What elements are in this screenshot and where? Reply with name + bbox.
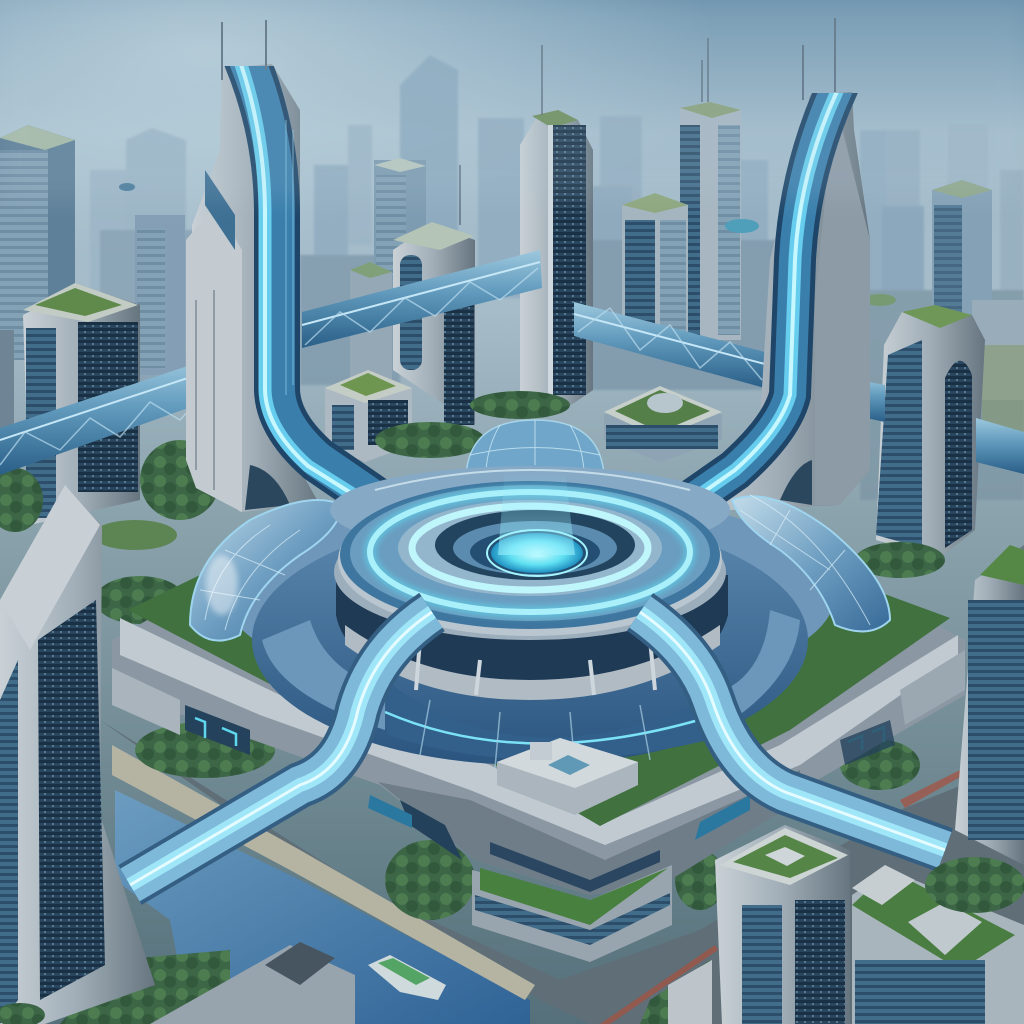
- foreground tower bottom centre: [715, 825, 850, 1024]
- right pylon tower: [685, 18, 870, 510]
- channel: front left: [130, 612, 432, 885]
- ground: road and water: [60, 720, 1024, 1024]
- podium: front panels: [378, 770, 800, 895]
- atmospheric haze: [0, 0, 1024, 200]
- tube: right upper: [574, 302, 765, 388]
- podium: planted terraces: [128, 555, 950, 826]
- rooftop module: [497, 738, 638, 815]
- ferry boat: [368, 955, 446, 1000]
- dome: left shell: [190, 500, 342, 641]
- dome: right shell: [732, 495, 890, 631]
- tower: right with green roof: [876, 305, 985, 558]
- podium: body: [112, 500, 965, 895]
- drum: rear deck: [330, 466, 730, 554]
- hub podium base: [112, 500, 965, 895]
- pylon tube: [232, 40, 385, 510]
- channel: front right: [640, 612, 945, 850]
- vehicle: distant craft: [119, 183, 135, 191]
- tower: blue centre: [374, 158, 426, 280]
- foreground tower right: [955, 545, 1024, 865]
- antennae: [460, 38, 708, 225]
- building: roof garden: [604, 386, 722, 462]
- pylon tube: [685, 65, 850, 505]
- core energy beam: [498, 470, 575, 555]
- foreground building bottom right: [852, 857, 1024, 1024]
- building: small block: [325, 370, 412, 462]
- tube: right lower: [838, 376, 885, 422]
- mid-ground towers left: [0, 125, 475, 525]
- tower: left foreground block: [23, 283, 140, 525]
- left pylon tower: [186, 20, 385, 512]
- podium: upper rim: [120, 618, 958, 845]
- elevated tubes: [0, 250, 1024, 475]
- tower: central twin: [520, 110, 593, 416]
- tube: left lower: [0, 358, 216, 475]
- foreground tower left: [0, 485, 155, 1024]
- tower: back right: [680, 102, 741, 340]
- podium: cyan light marks: [195, 718, 884, 750]
- tower: mid right: [622, 193, 688, 345]
- tube: left upper: [302, 250, 542, 348]
- podium: dark window strip: [490, 842, 660, 892]
- distant hazy skyline: [90, 55, 1024, 500]
- mid-ground towers right: [520, 102, 1024, 558]
- vehicle: hover craft: [725, 219, 759, 233]
- tower: small rear left: [350, 222, 475, 425]
- greenery behind hub: [0, 294, 945, 624]
- hover vehicles: [119, 183, 759, 233]
- dome: rear glass: [466, 420, 604, 475]
- lower front block: [472, 865, 672, 962]
- glowing channels: [130, 612, 945, 885]
- foreground building bottom left: [0, 942, 712, 1024]
- tower: slim: [135, 215, 185, 375]
- tower: far right: [932, 180, 1024, 435]
- tower: far left: [0, 125, 75, 430]
- hub central drum: [330, 466, 730, 700]
- hub lower roof: [225, 490, 835, 768]
